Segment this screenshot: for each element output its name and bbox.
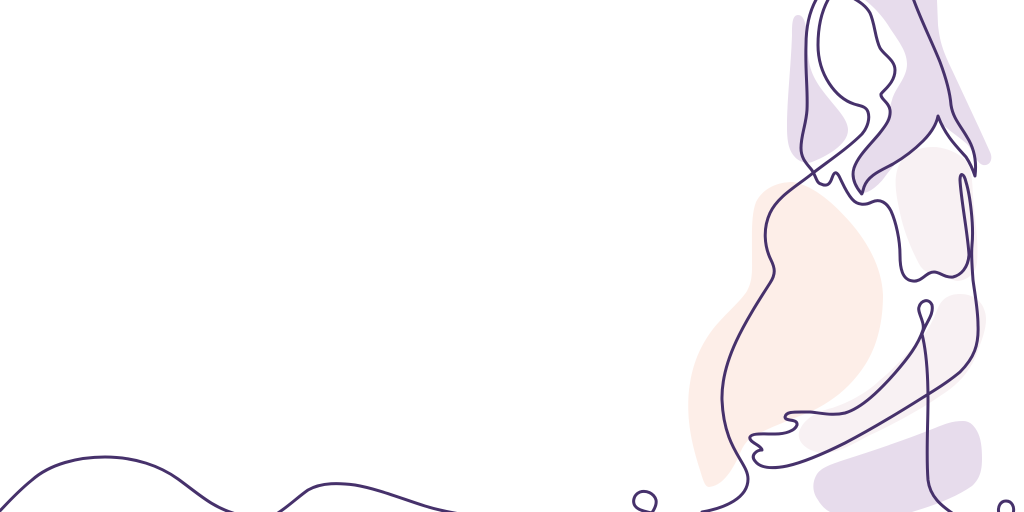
- line: right hair contour: [853, 0, 976, 194]
- blob: belly: [688, 182, 883, 487]
- line: belly and face contour: [702, 0, 869, 512]
- blob: forearm: [799, 294, 986, 453]
- blob: left hair: [787, 15, 848, 163]
- blob: lap: [813, 421, 982, 512]
- line: left ground wave: [0, 457, 236, 512]
- line: ground loop: [634, 491, 656, 512]
- blob: back: [896, 147, 977, 281]
- blob: right hair: [855, 0, 991, 193]
- line: hair, shoulder, arm and leg contour: [750, 0, 978, 512]
- line: right ground loop: [998, 501, 1014, 512]
- line: middle ground wave: [278, 484, 460, 512]
